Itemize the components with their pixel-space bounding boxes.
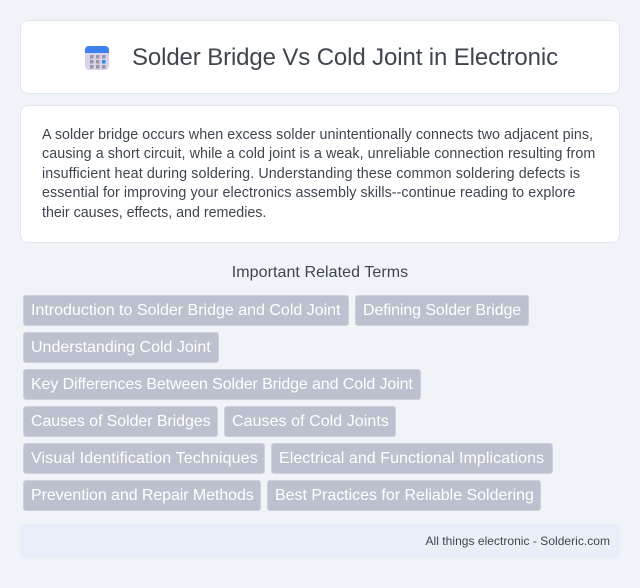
tag: Best Practices for Reliable Soldering bbox=[275, 487, 534, 504]
tag: Understanding Cold Joint bbox=[31, 339, 211, 356]
tag: Key Differences Between Solder Bridge and Cold Joint bbox=[31, 376, 413, 393]
tag bbox=[23, 332, 219, 363]
intro text panel: insufficient heat during soldering. Understanding these common soldering defects is bbox=[42, 166, 580, 182]
related terms heading: Important Related Terms bbox=[232, 264, 408, 281]
tag bbox=[224, 406, 396, 437]
tag bbox=[23, 295, 349, 326]
intro text panel: causing a short circuit, while a cold joint is a weak, unreliable connection resulting from bbox=[42, 146, 595, 162]
intro text panel: their causes, effects, and remedies. bbox=[42, 205, 266, 221]
tag: Electrical and Functional Implications bbox=[279, 450, 544, 467]
title: Solder Bridge Vs Cold Joint in Electronic bbox=[132, 44, 558, 71]
tag: Prevention and Repair Methods bbox=[31, 487, 254, 504]
tag bbox=[267, 480, 541, 511]
header panel bbox=[20, 20, 620, 94]
tag: Introduction to Solder Bridge and Cold Joint bbox=[31, 302, 341, 319]
tag: Causes of Cold Joints bbox=[232, 413, 389, 430]
footer: All things electronic - Solderic.com bbox=[426, 534, 610, 548]
intro text panel: A solder bridge occurs when excess solder unintentionally connects two adjacent pins, bbox=[42, 127, 593, 143]
tag: Visual Identification Techniques bbox=[31, 450, 258, 467]
intro text panel: essential for improving your electronics assembly skills--continue reading to explore bbox=[42, 185, 576, 201]
tag: Causes of Solder Bridges bbox=[31, 413, 211, 430]
tag bbox=[23, 406, 218, 437]
tag: Defining Solder Bridge bbox=[363, 302, 521, 319]
related term tags bbox=[23, 295, 553, 511]
footer bbox=[20, 524, 620, 558]
tag bbox=[355, 295, 529, 326]
tag bbox=[23, 480, 261, 511]
tag bbox=[23, 443, 265, 474]
tag bbox=[23, 369, 421, 400]
tag bbox=[271, 443, 553, 474]
icon: calendar bbox=[85, 46, 109, 70]
intro text panel bbox=[20, 105, 620, 243]
